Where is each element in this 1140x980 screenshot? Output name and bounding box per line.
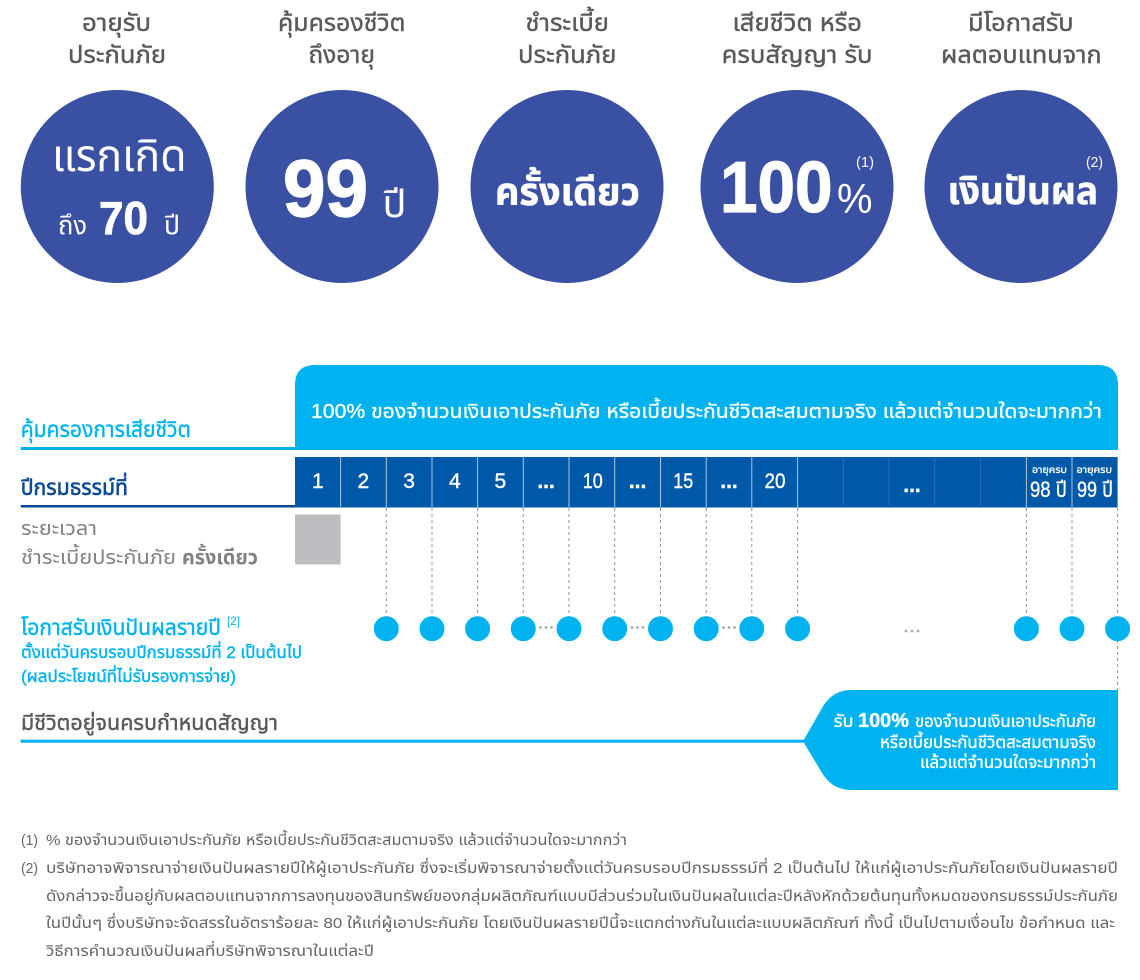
bar: policy years: 1	[312, 470, 324, 493]
heading: dividend: ผลตอบแทนจาก	[941, 42, 1102, 69]
bar: policy years: อายุครบ	[1076, 465, 1112, 476]
panel: premium payment	[470, 6, 664, 283]
underline: policy year	[21, 505, 296, 508]
panel: death or maturity benefit	[700, 10, 894, 283]
heading: coverage age: ถึงอายุ	[308, 42, 375, 70]
bar: policy years: ...	[629, 470, 646, 493]
callout shape: maturity benefit	[803, 690, 1118, 790]
heading: entry age: ประกันภัย	[68, 42, 166, 69]
text: dividend: เงินปันผล	[948, 171, 1098, 213]
line: survival to maturity	[21, 740, 806, 743]
heading: coverage age: คุ้มครองชีวิต	[278, 10, 406, 38]
callout text: maturity benefit: 100%	[858, 710, 909, 732]
label: annual dividend: โอกาสรับเงินปันผลรายปี	[21, 615, 221, 640]
heading: dividend: มีโอกาสรับ	[968, 10, 1074, 37]
text: 99 years: ปี	[382, 184, 406, 226]
bar: policy years: 5	[495, 470, 506, 493]
text: 99 years: 99	[283, 144, 368, 234]
heading: death or maturity: ครบสัญญา รับ	[722, 42, 873, 69]
connectors: year to dividend	[386, 508, 1118, 690]
footnote 1: (1)	[21, 832, 38, 849]
bar: policy years: ...	[537, 470, 555, 493]
circle: benefit	[700, 90, 894, 283]
bar: policy years: ...	[903, 474, 921, 497]
heading: dividend	[941, 10, 1102, 69]
callout text: maturity benefit	[834, 710, 1096, 772]
ellipses between dots	[539, 626, 919, 632]
bar: policy years: 3	[403, 470, 415, 493]
label: annual dividend: (ผลประโยชน์ที่ไม่รับรองการจ่าย)	[21, 665, 236, 686]
bar: policy years: อายุครบ	[1032, 465, 1067, 476]
bar: policy years: 4	[449, 470, 461, 493]
text: single payment: ครั้งเดียว	[495, 166, 640, 214]
footnote 2: บริษัทอาจพิจารณาจ่ายเงินปันผลรายปีให้ผู้เอาประกันภัย ซึ่งจะเริ่มพิจารณาจ่ายตั้งแต่วันครบรอบปีกรมธรรม์ที่ 2 เป็นต้นไป ให้แก่ผู้เอาประกันภัยโดยเงินปันผลรายปี	[46, 857, 1118, 877]
callout text: maturity benefit: หรือเบี้ยประกันชีวิตสะสมตามจริง	[880, 731, 1096, 752]
text: dividend: (2)	[1086, 154, 1103, 171]
label: annual dividend: ตั้งแต่วันครบรอบปีกรมธรรม์ที่ 2 เป็นต้นไป	[21, 641, 302, 662]
text: birth: แรกเกิด	[52, 130, 186, 181]
heading: premium payment: ชำระเบี้ย	[526, 6, 609, 37]
heading: premium payment: ประกันภัย	[518, 42, 616, 69]
label: premium period: ระยะเวลา	[21, 518, 97, 540]
row: survival to maturity	[21, 690, 1118, 790]
bar: policy years: 99 ปี	[1077, 477, 1113, 502]
text: 100 percent: %	[837, 175, 872, 222]
label: annual dividend	[21, 614, 302, 686]
text: 100 percent: (1)	[856, 154, 874, 171]
heading: death or maturity	[722, 10, 873, 69]
underline: death coverage	[21, 447, 296, 450]
text: death benefit: 100% ของจำนวนเงินเอาประกันภัย หรือเบี้ยประกันชีวิตสะสมตามจริง แล้วแต่จำนวนใดจะมากกว่า	[311, 397, 1102, 423]
callout text: maturity benefit: แล้วแต่จำนวนใดจะมากกว่า	[920, 754, 1096, 772]
text: to 70 years: ปี	[164, 210, 180, 240]
footnote 2: (2)	[21, 860, 38, 877]
label: premium period: ชำระเบี้ยประกันภัย	[21, 543, 176, 569]
bar: policy years: 2	[358, 470, 369, 493]
panel: entry age	[21, 10, 214, 283]
callout text: maturity benefit: ของจำนวนเงินเอาประกันภัย	[915, 713, 1096, 731]
circle: premium payment	[470, 90, 664, 283]
panel: coverage age	[246, 10, 438, 283]
text: 100 percent: 100	[720, 148, 832, 228]
label: annual dividend: [2]	[227, 614, 240, 628]
heading: death or maturity: เสียชีวิต หรือ	[732, 10, 862, 37]
circle: coverage age	[246, 90, 438, 283]
label: premium period	[21, 518, 258, 569]
bar: policy years: ...	[720, 470, 738, 493]
bar: policy years: 98 ปี	[1030, 477, 1067, 502]
bar: policy years: 20	[764, 470, 786, 493]
footnotes	[21, 829, 1118, 960]
label: survival to maturity: มีชีวิตอยู่จนครบกำหนดสัญญา	[21, 711, 278, 736]
dots: annual dividend markers	[374, 616, 1130, 641]
block: premium year 1	[295, 514, 341, 564]
text: to 70 years: 70	[99, 192, 148, 244]
footnote 2: วิธีการคำนวณเงินปันผลที่บริษัทพิจารณาในแต่ละปี	[45, 940, 374, 960]
band: death benefit	[295, 365, 1118, 450]
callout text: maturity benefit: รับ	[834, 713, 854, 731]
row: policy year	[21, 457, 1118, 508]
row: annual dividend	[21, 614, 1130, 686]
circle: dividend	[924, 90, 1118, 283]
panel: dividend	[924, 10, 1118, 283]
row: death coverage	[21, 365, 1118, 450]
heading: entry age: อายุรับ	[82, 10, 151, 38]
circle: entry age	[21, 90, 214, 283]
footnote 1: % ของจำนวนเงินเอาประกันภัย หรือเบี้ยประกันชีวิตสะสมตามจริง แล้วแต่จำนวนใดจะมากกว่า	[46, 829, 627, 849]
text: to 70 years	[58, 192, 180, 244]
footnote 2: ดังกล่าวจะขึ้นอยู่กับผลตอบแทนจากการลงทุนของสินทรัพย์ของกลุ่มผลิตภัณฑ์แบบมีส่วนร่วมในเงินปันผลในแต่ละปีหลังหักด้วยต้นทุนทั้งหมดของกรมธรรม์ประกันภัย	[46, 885, 1118, 905]
label: death coverage: คุ้มครองการเสียชีวิต	[21, 417, 191, 443]
bar: policy years: 10	[583, 470, 603, 493]
heading: entry age	[68, 10, 166, 69]
text: to 70 years: ถึง	[58, 210, 87, 240]
row: premium period	[21, 514, 341, 569]
bar: policy years: 15	[673, 470, 693, 493]
label: policy year: ปีกรมธรรม์ที่	[21, 472, 128, 500]
label: premium period: ครั้งเดียว	[182, 544, 258, 569]
footnote 2: ในปีนั้นๆ ซึ่งบริษัทจะจัดสรรในอัตราร้อยละ 80 ให้แก่ผู้เอาประกันภัย โดยเงินปันผลรายปีนี้จะแตกต่างกันในแต่ละแบบผลิตภัณฑ์ ทั้งนี้ เป็นไปตามเงื่อนไข ข้อกำหนด และ	[46, 912, 1115, 932]
bar: policy years	[295, 457, 1118, 508]
footnote 2	[21, 857, 1118, 960]
heading: premium payment	[518, 6, 616, 69]
heading: coverage age	[278, 10, 406, 70]
